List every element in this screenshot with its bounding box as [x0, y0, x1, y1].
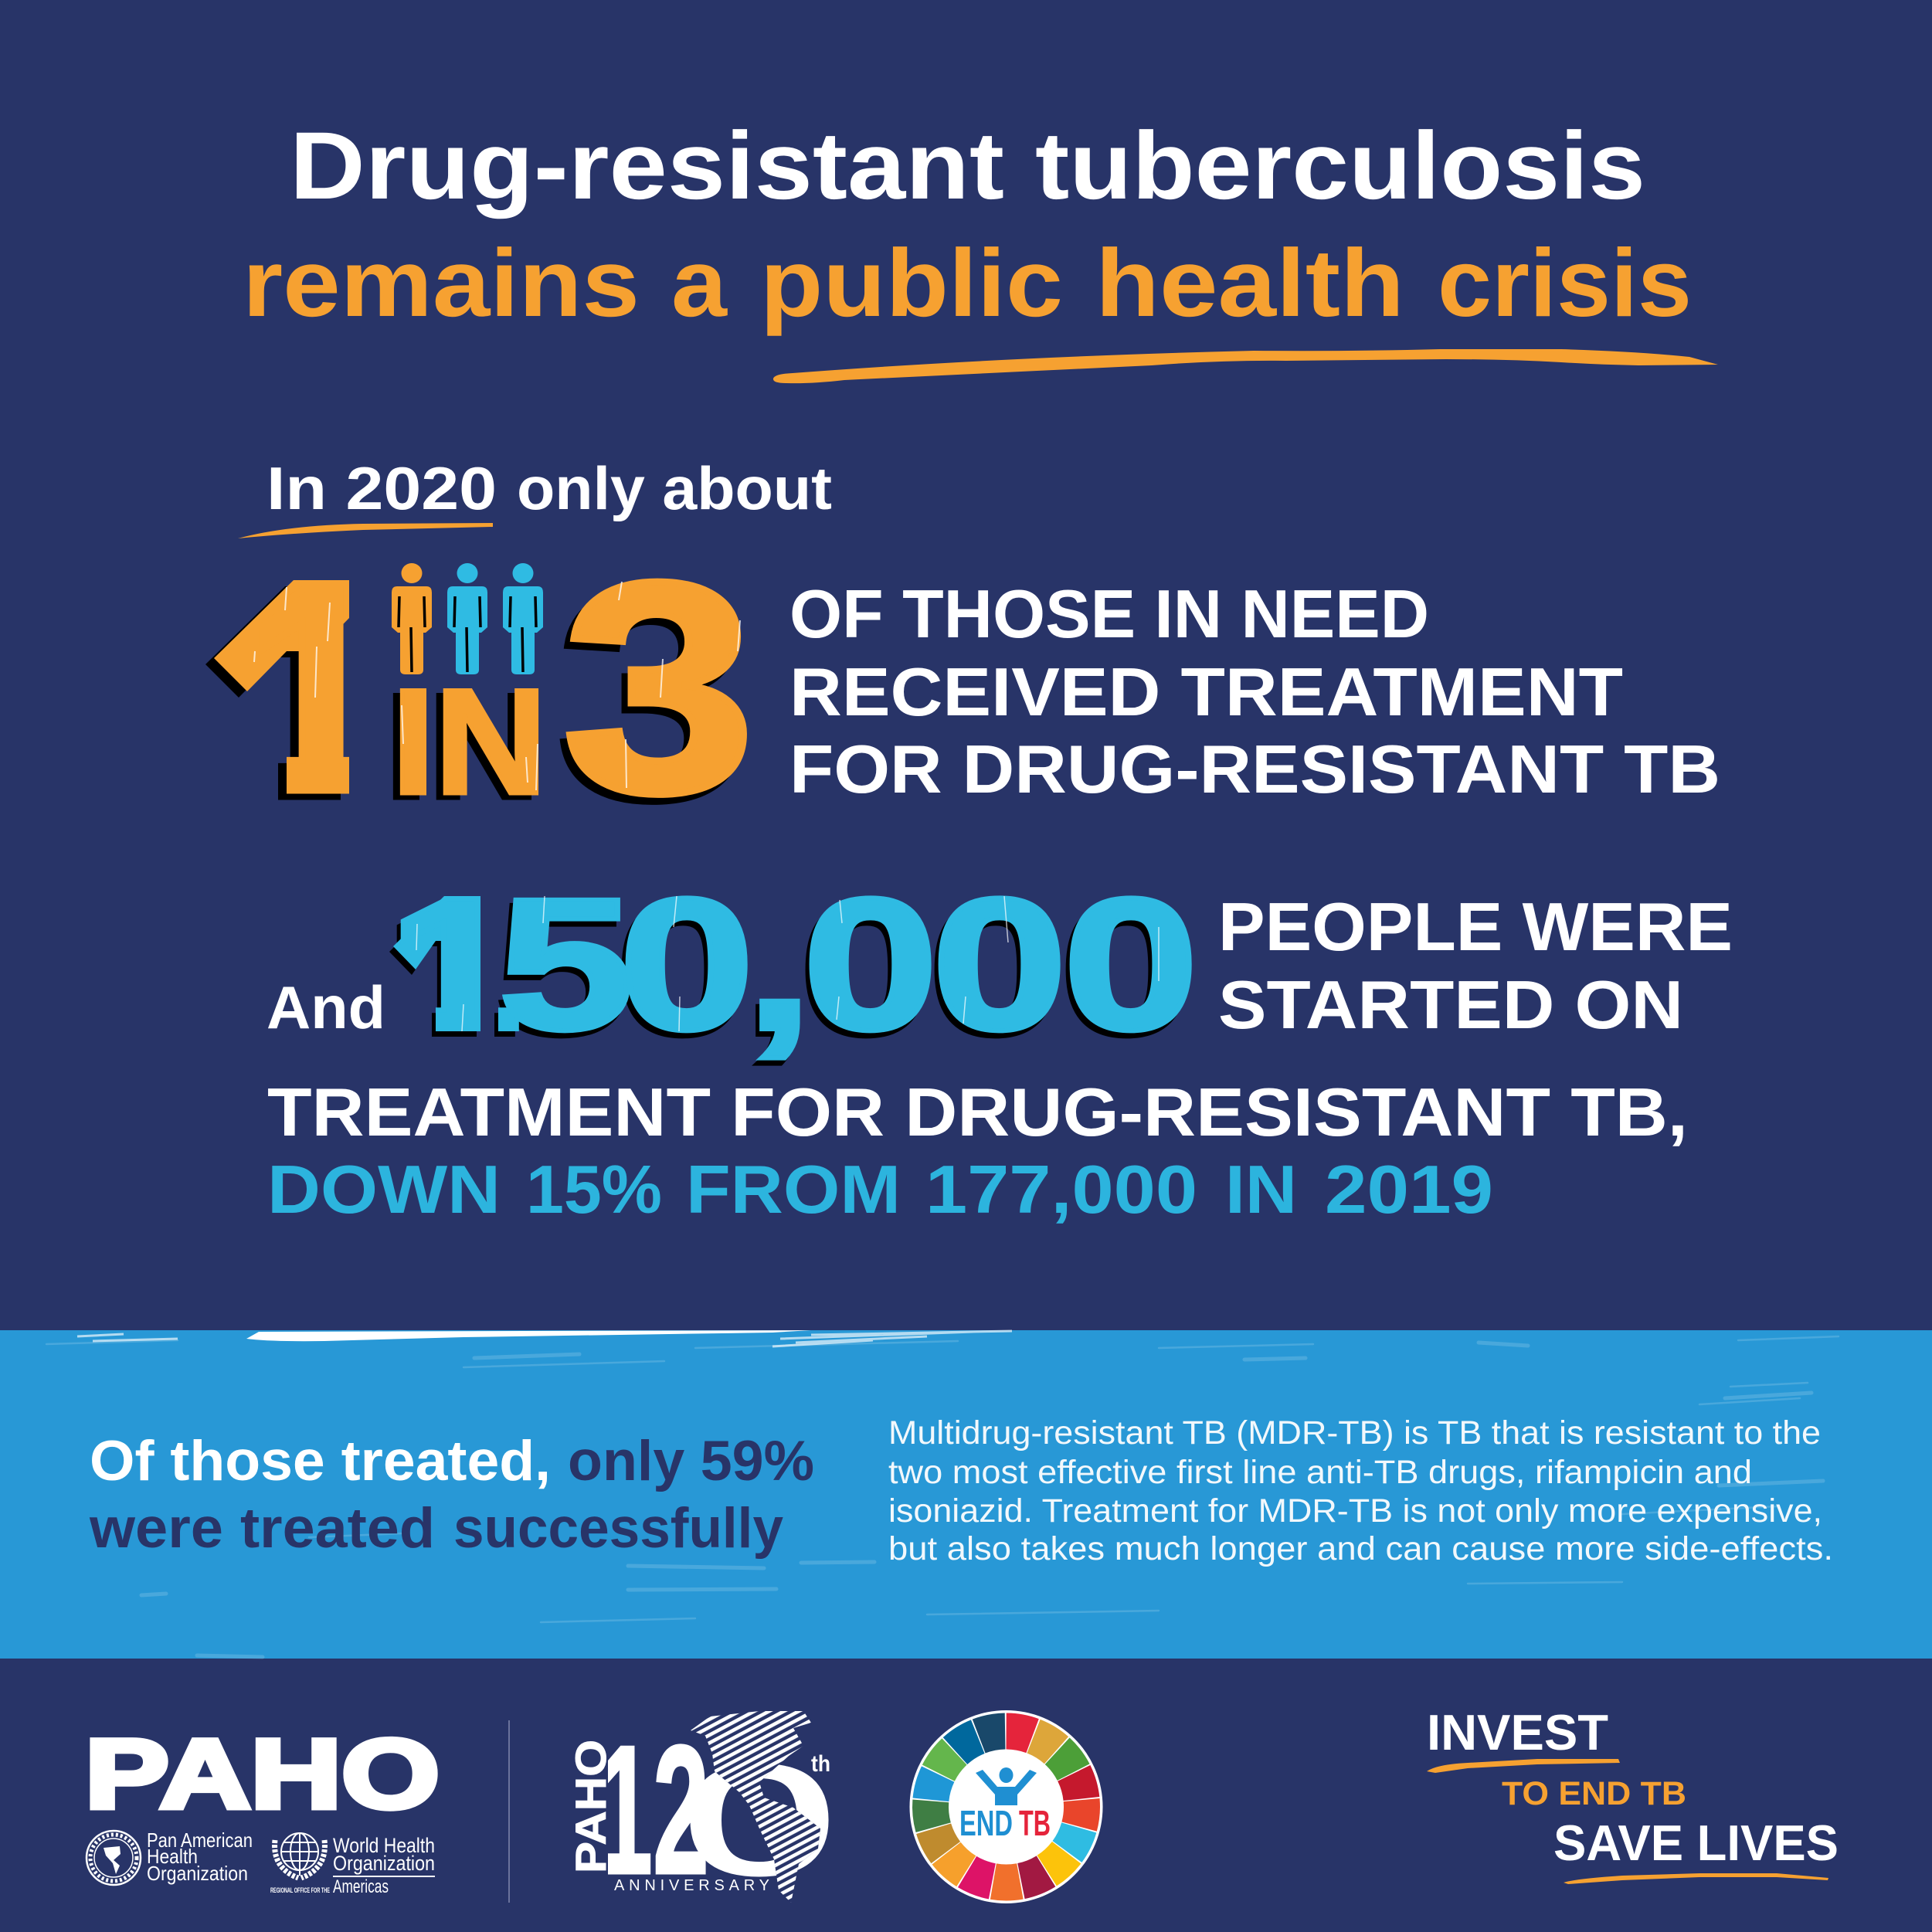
campaign slogan: [1427, 1704, 1839, 1884]
icon: person with raised arms: [976, 1767, 1037, 1805]
text: END TB: TB: [1019, 1803, 1051, 1843]
logo: PAHO: PAHO: [85, 1719, 440, 1828]
callout: only 59%: [89, 1430, 814, 1560]
text: down 15%: DOWN: [267, 1151, 501, 1227]
icon: three people: [392, 563, 543, 674]
text: MDR-TB definition: isoniazid. Treatment for MDR-TB is not only more expensive,: [888, 1493, 1822, 1530]
title: crisis: [1438, 230, 1692, 337]
word IN: IN: [392, 658, 547, 826]
callout: only 59%: treated: [240, 1497, 435, 1560]
text: World Health Organization: World Health: [333, 1834, 435, 1857]
invest underline: [1427, 1759, 1620, 1773]
text: people were started on: STARTED ON: [1218, 966, 1683, 1043]
text: down 15%: [267, 1151, 1493, 1227]
white brush top edge: [246, 1330, 811, 1341]
title: Drug-resistant: [290, 113, 1004, 219]
title: [243, 113, 1692, 337]
campaign slogan: SAVE LIVES: [1553, 1815, 1839, 1871]
text: of those in need: RECEIVED TREATMENT: [789, 654, 1623, 730]
text: Pan American Health Organization: [147, 1828, 253, 1885]
callout: only 59%: were: [89, 1497, 223, 1560]
number 120: [608, 1744, 829, 1877]
person orange: [392, 563, 432, 674]
text: And: And: [267, 973, 385, 1041]
number 120: 12: [596, 1708, 709, 1913]
callout: only 59%: Of those treated,: [90, 1430, 551, 1492]
text: of those in need: OF THOSE IN NEED: [789, 576, 1429, 652]
text: World Health Organization: REGIONAL OFFICE FOR THE: [270, 1886, 330, 1894]
text: down 15%: 15%: [526, 1151, 662, 1227]
text: people were started on: [1218, 888, 1733, 1043]
text: World Health Organization: Organization: [333, 1852, 435, 1875]
icon: WHO emblem: [275, 1833, 324, 1878]
text: Pan American Health Organization: Pan American: [147, 1828, 253, 1852]
numeral 3: 3: [562, 521, 755, 855]
text: treatment for drug-resistant TB: TREATMENT FOR DRUG-RESISTANT TB,: [267, 1074, 1688, 1150]
person blue 2: [503, 563, 543, 674]
number 120: 0: [683, 1734, 836, 1907]
text: people were started on: PEOPLE WERE: [1218, 888, 1733, 965]
numeral 1: 1: [237, 527, 392, 853]
intro text: In 2020: [267, 454, 497, 522]
text: MDR-TB definition: but also takes much longer and can cause more side-effects.: [888, 1531, 1833, 1567]
map stripes: [691, 1711, 820, 1903]
intro underline: [238, 523, 493, 538]
title: public: [760, 230, 1063, 337]
statistic: 150,000: 150,000: [387, 859, 1199, 1069]
text: of those in need: FOR DRUG-RESISTANT TB: [789, 731, 1720, 807]
ordinal th: th: [811, 1751, 830, 1777]
text: down 15%: 2019: [1325, 1151, 1493, 1227]
person blue 1: [447, 563, 487, 674]
icon: PAHO seal: [87, 1831, 141, 1885]
intro text: [267, 454, 832, 522]
logo: PAHO: [85, 1719, 440, 1897]
text: Pan American Health Organization: Health: [147, 1845, 198, 1868]
callout: only 59%: only 59%: [568, 1430, 814, 1492]
numeral 1: [205, 580, 349, 800]
campaign slogan: INVEST: [1427, 1704, 1608, 1761]
text: World Health Organization: Americas: [333, 1876, 389, 1897]
text: World Health Organization: [270, 1834, 435, 1897]
text: Pan American Health Organization: Organization: [147, 1862, 248, 1885]
title: a: [671, 230, 728, 337]
text: MDR-TB definition: [888, 1415, 1833, 1567]
anniversary label: ANNIVERSARY: [614, 1877, 769, 1894]
text: MDR-TB definition: Multidrug-resistant TB (MDR-TB) is TB that is resistant to the: [888, 1415, 1821, 1452]
vertical PAHO: PAHO: [566, 1740, 615, 1873]
title: remains: [243, 230, 640, 337]
callout: only 59%: successfully: [453, 1497, 783, 1560]
title: tuberculosis: [1035, 113, 1645, 219]
text: of those in need: [789, 576, 1720, 807]
text: MDR-TB definition: two most effective first line anti-TB drugs, rifampicin and: [888, 1455, 1752, 1491]
logo: PAHO 120th anniversary: [575, 1711, 830, 1903]
panel: blue band: [0, 1330, 1932, 1659]
title underline brush stroke: [773, 349, 1718, 383]
statistic: 1 in 3: [205, 578, 747, 805]
text: down 15%: FROM: [686, 1151, 901, 1227]
campaign slogan: TO END TB: [1502, 1775, 1686, 1812]
save lives underline: [1564, 1873, 1828, 1884]
title: health: [1095, 230, 1404, 337]
text: END TB: END: [959, 1803, 1013, 1843]
text: down 15%: IN: [1225, 1151, 1297, 1227]
intro text: only about: [517, 454, 832, 522]
logo: End TB wheel: [899, 1700, 1113, 1913]
text: down 15%: 177,000: [925, 1151, 1197, 1227]
